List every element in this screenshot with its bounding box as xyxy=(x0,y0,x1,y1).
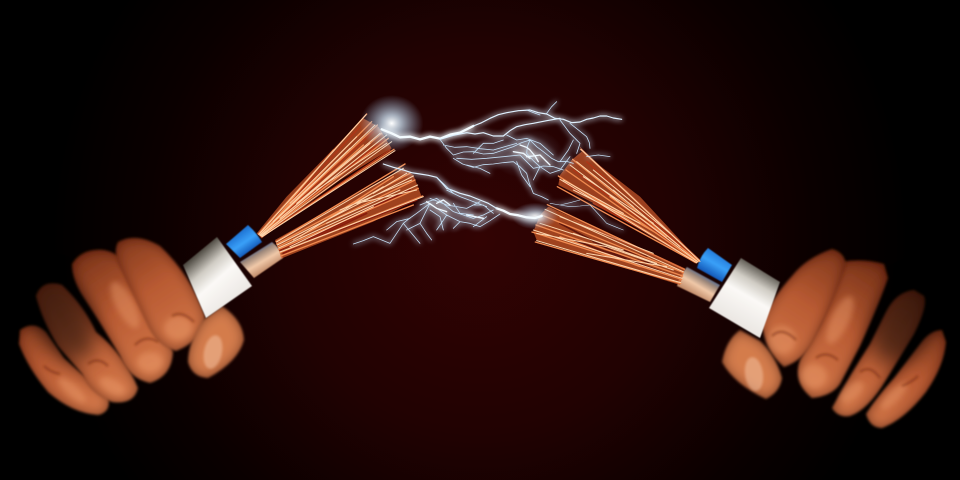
right white jacket xyxy=(709,258,780,338)
finger: right ring xyxy=(832,290,925,416)
finger: left ring xyxy=(36,283,138,402)
right cable xyxy=(677,248,780,338)
highlights: right hand xyxy=(768,293,911,413)
thumbnail: right xyxy=(743,356,765,392)
copper bundle: left top xyxy=(257,114,395,238)
finger: right index xyxy=(762,249,846,367)
copper bundle: right top xyxy=(557,149,700,263)
left white jacket xyxy=(183,237,252,318)
shadow: left hand outer fingers xyxy=(16,264,108,372)
left tan conductor xyxy=(240,242,283,278)
copper strands and lightning (zoomed coordinates) xyxy=(257,95,700,285)
finger: right middle xyxy=(798,260,888,398)
knuckle creases: left xyxy=(44,314,194,374)
highlights: left hand xyxy=(55,278,192,407)
finger: left thumb xyxy=(188,306,244,378)
lightning: upper bolt xyxy=(382,102,622,200)
copper bundle: right bottom xyxy=(532,205,685,285)
right blue conductor xyxy=(697,248,732,282)
finger: left index xyxy=(116,238,205,351)
stray strand right xyxy=(573,147,700,268)
left blue conductor xyxy=(226,225,262,258)
knuckle creases: right xyxy=(772,332,918,386)
spark glow: top-left and lower-right xyxy=(360,95,423,152)
copper bundle: left bottom xyxy=(275,164,423,258)
left cable xyxy=(183,225,283,318)
left hand xyxy=(16,238,244,415)
finger: right thumb xyxy=(722,330,782,399)
finger: left middle xyxy=(72,250,173,383)
right tan conductor xyxy=(677,267,720,302)
right hand xyxy=(722,249,951,428)
finger: right pinky xyxy=(866,330,946,428)
thumbnail: left xyxy=(201,334,225,370)
lightning: lower bolt xyxy=(353,164,623,244)
finger: left pinky xyxy=(19,325,109,415)
shadow: right hand outer fingers xyxy=(859,268,951,376)
